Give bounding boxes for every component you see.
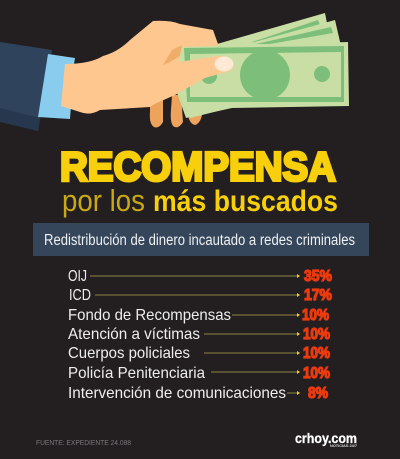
row: OIJ (68, 268, 332, 285)
subtitle: por los (62, 183, 145, 218)
row: Cuerpos policiales (68, 345, 330, 362)
row: Policía Penitenciaria: 10% (303, 365, 330, 382)
row: ICD: ICD (69, 287, 91, 304)
icon: back banknotes (176, 13, 341, 118)
row: Fondo de Recompensas: Fondo de Recompensas (68, 307, 231, 324)
row: Cuerpos policiales: Cuerpos policiales (68, 345, 190, 362)
row: Policía Penitenciaria: Policía Penitenciaria (68, 365, 205, 382)
row: ICD: 17% (304, 287, 332, 304)
row: Atención a víctimas: 10% (303, 326, 330, 343)
row: Atención a víctimas: Atención a víctimas (68, 326, 200, 343)
icon: left circle (201, 68, 217, 84)
icon: hand (61, 21, 218, 114)
row: Intervención de comunicaciones: 8% (308, 385, 328, 402)
icon: large central circle (240, 50, 290, 100)
icon: jacket sleeve (0, 42, 52, 131)
icon: back fingers (150, 95, 203, 127)
icon: front banknote (176, 42, 349, 118)
icon: right circle (314, 66, 330, 82)
row: Atención a víctimas (68, 326, 330, 343)
source note: FUENTE: EXPEDIENTE 24.088 (36, 440, 131, 447)
list of allocations (68, 268, 332, 402)
icon: thumbnail (214, 56, 234, 72)
row: Cuerpos policiales: 10% (303, 345, 330, 362)
row: Fondo de Recompensas: 10% (302, 307, 329, 324)
row: Fondo de Recompensas (68, 307, 329, 324)
row: ICD (69, 287, 332, 304)
banner (33, 223, 369, 256)
subtitle (62, 183, 338, 218)
logo: crhoy.com: crhoy.com (295, 431, 357, 446)
icon: shirt cuff (38, 54, 75, 119)
row: OIJ: 35% (304, 268, 332, 285)
row: OIJ: OIJ (68, 268, 87, 285)
illustration: hand holding money (0, 13, 349, 131)
row: Intervención de comunicaciones: Intervención de comunicaciones (68, 385, 286, 402)
title: RECOMPENSA: RECOMPENSA (60, 144, 336, 190)
icon: thumb (140, 56, 234, 106)
icon: thumb shadow (163, 45, 182, 65)
row: Policía Penitenciaria (68, 365, 330, 382)
subtitle: más buscados (153, 185, 338, 218)
logo: crhoy.com: NOTICIAS 24/7 (330, 444, 357, 448)
